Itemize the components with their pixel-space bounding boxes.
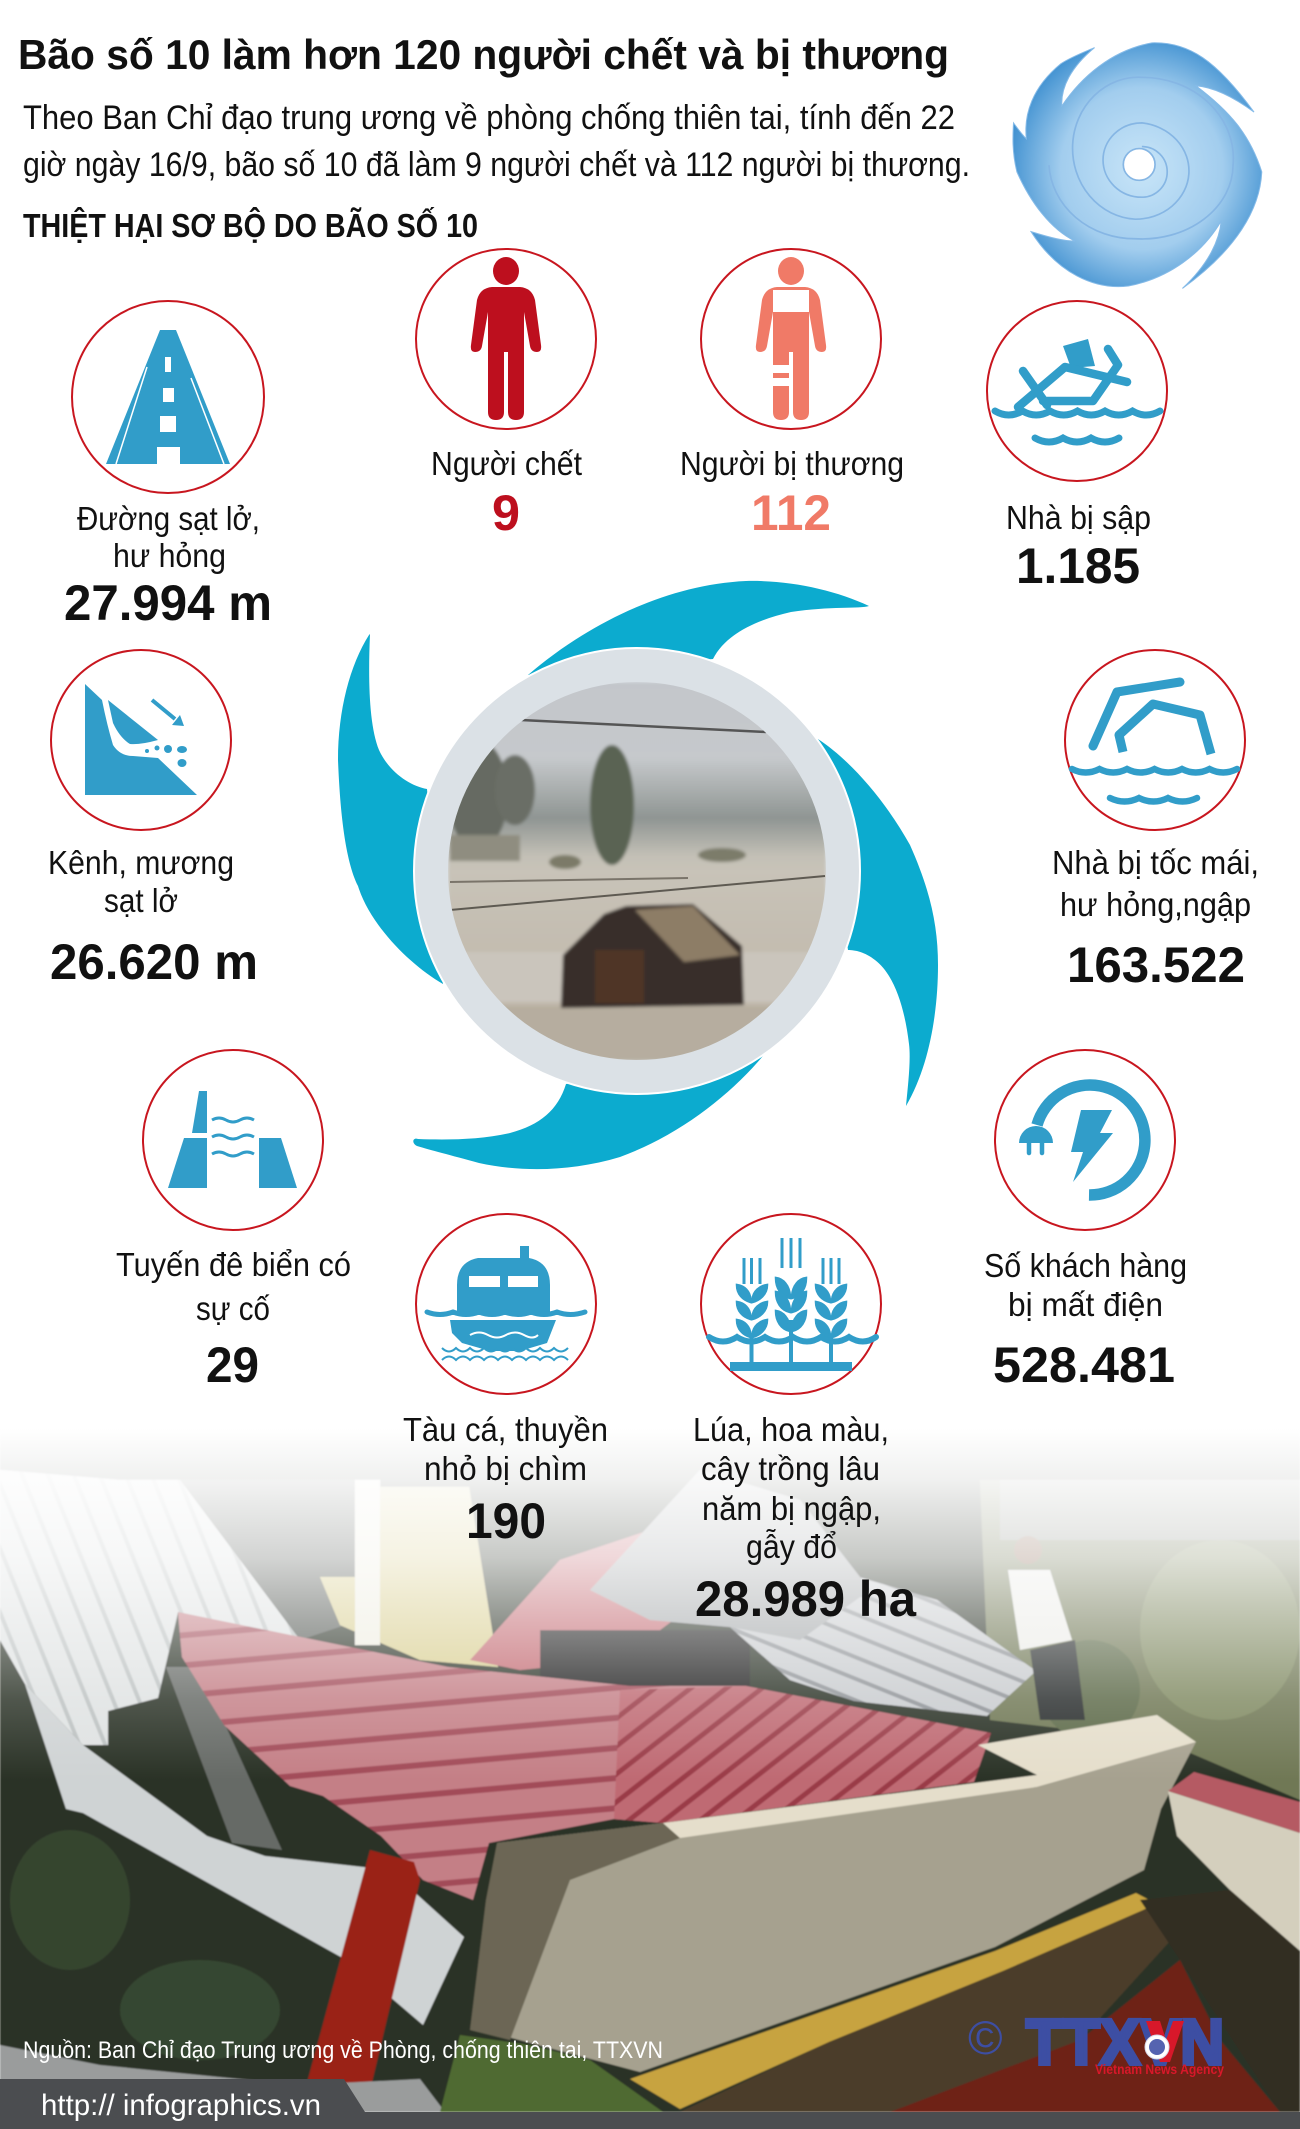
icon: person: [416, 249, 596, 429]
item: canals: [48, 650, 258, 990]
item: crops: gẫy đổ: [746, 1528, 837, 1565]
item: crops: cây trồng lâu: [701, 1450, 880, 1487]
footer url: http:// infographics.vn: [41, 2089, 321, 2122]
item: power outage: Số khách hàng: [984, 1247, 1187, 1284]
item: canals: sạt lở: [104, 882, 178, 919]
intro text: [23, 99, 970, 184]
item: dead: 9: [492, 485, 520, 541]
blade: right: [818, 739, 938, 1106]
item: injured: 112: [751, 485, 831, 541]
item: damaged roofs: 163.522: [1067, 937, 1245, 993]
icon: collapsed house: [987, 301, 1167, 481]
item: sea dike: [116, 1050, 351, 1393]
background photo: collapsed roof and wall: [0, 1420, 1300, 2112]
intro text: giờ ngày 16/9, bão số 10 đã làm 9 người chết và 112 người bị thương.: [23, 146, 970, 184]
item: boats: Tàu cá, thuyền: [403, 1411, 608, 1448]
item: power outage: 528.481: [993, 1337, 1175, 1393]
item: power outage: [984, 1050, 1187, 1393]
item: boats: [403, 1214, 608, 1549]
item: damaged roofs: Nhà bị tốc mái,: [1052, 844, 1259, 881]
storm graphic with central photo: [338, 581, 938, 1169]
icon: broken dike: [143, 1050, 323, 1230]
item: damaged roofs: hư hỏng,ngập: [1060, 886, 1251, 923]
item: sea dike: 29: [206, 1337, 259, 1393]
item: crops: năm bị ngập,: [702, 1490, 881, 1527]
item: injured: [680, 249, 904, 541]
item: road: Đường sạt lở,: [77, 500, 260, 537]
item: canals: 26.620 m: [50, 934, 258, 990]
item: sea dike: sự cố: [196, 1290, 270, 1327]
icon: injured person: [701, 249, 881, 429]
section heading: THIỆT HẠI SƠ BỘ DO BÃO SỐ 10: [23, 206, 478, 244]
blade: top: [528, 581, 869, 675]
logo: TTXVN: ©: [968, 2011, 1003, 2064]
item: road: 27.994 m: [64, 575, 272, 631]
item: canals: Kênh, mương: [48, 844, 234, 881]
item: collapsed houses: [987, 301, 1167, 594]
item: dead: [416, 249, 596, 541]
item: sea dike: Tuyến đê biển có: [116, 1246, 351, 1283]
title: Bão số 10 làm hơn 120 người chết và bị thương: [18, 31, 949, 78]
icon: flooded crops: [701, 1214, 881, 1394]
item: boats: nhỏ bị chìm: [424, 1450, 587, 1487]
blade: bottom: [413, 1056, 763, 1169]
icon: sinking boat: [416, 1214, 596, 1394]
item: power outage: bị mất điện: [1008, 1286, 1163, 1323]
source note: Nguồn: Ban Chỉ đạo Trung ương về Phòng, chống thiên tai, TTXVN: [23, 2037, 663, 2064]
blade: left: [338, 634, 443, 984]
item: road: [64, 301, 272, 631]
item: road: hư hỏng: [113, 537, 226, 574]
icon: flooded roof: [1065, 650, 1245, 830]
icon: road: [72, 301, 264, 493]
item: boats: 190: [466, 1493, 546, 1549]
flood photo: [448, 682, 826, 1061]
item: crops: Lúa, hoa màu,: [693, 1411, 889, 1448]
logo: TTXVN: Vietnam News Agency: [1095, 2061, 1224, 2077]
item: injured: Người bị thương: [680, 445, 904, 482]
white fade over photo: [0, 1410, 1300, 1780]
item: dead: Người chết: [431, 445, 582, 482]
ring: [414, 648, 860, 1094]
item: collapsed houses: Nhà bị sập: [1006, 499, 1151, 536]
intro text: Theo Ban Chỉ đạo trung ương về phòng chống thiên tai, tính đến 22: [23, 99, 955, 137]
footer bar: [0, 2079, 1300, 2129]
logo: TTXVN: TTXVN: [1026, 2006, 1224, 2078]
item: collapsed houses: 1.185: [1016, 538, 1140, 594]
item: crops: 28.989 ha: [695, 1571, 917, 1627]
icon: landslide: [51, 650, 231, 830]
icon: storm: [1013, 43, 1262, 288]
icon: plug and lightning: [995, 1050, 1175, 1230]
item: crops: [693, 1214, 917, 1627]
item: damaged roofs: [1052, 650, 1259, 993]
